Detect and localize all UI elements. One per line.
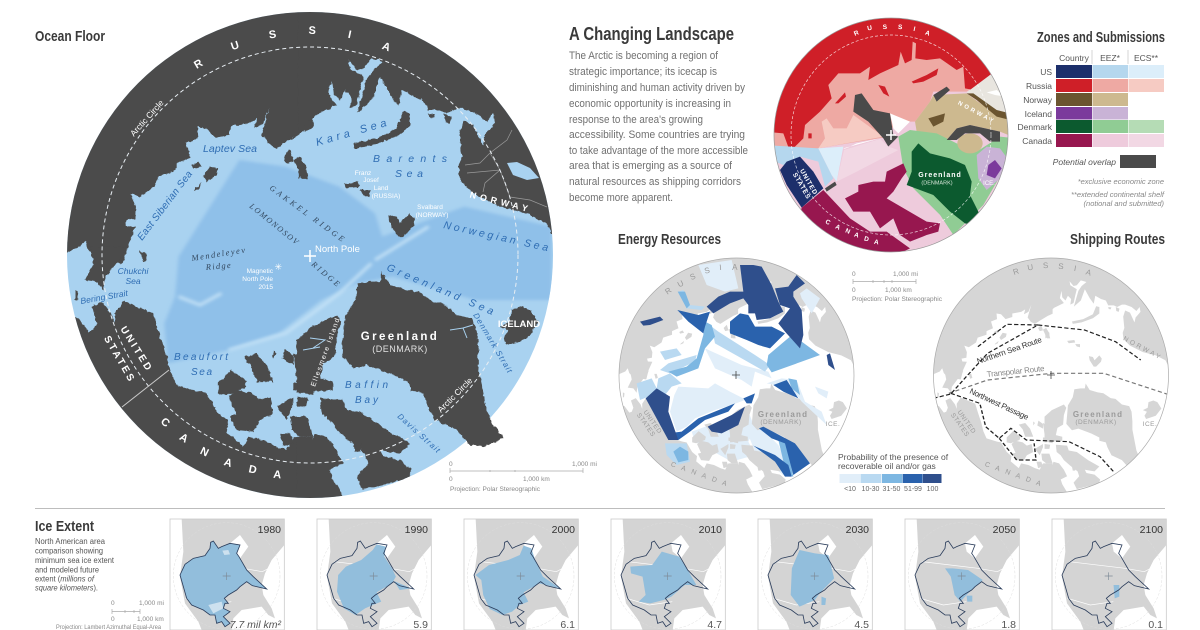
- intro text: economic opportunity is increasing in: [569, 98, 731, 110]
- scale bar: energy: 0: [852, 287, 856, 294]
- pole marker: [1047, 371, 1055, 379]
- Iceland land: [987, 160, 1002, 178]
- label: US zones: [791, 168, 819, 201]
- labels: Arctic Circle: [128, 98, 475, 414]
- label: Canada zones: A: [834, 223, 841, 232]
- label: United States: STATES: [101, 334, 137, 385]
- labels: Russia zones: I: [913, 26, 916, 33]
- label: Greenland: [361, 331, 439, 354]
- legend: zones table: Canada: [1022, 136, 1052, 146]
- labels: seas: Beaufort: [174, 352, 229, 363]
- labels: ridges: Mendeleyev: [190, 245, 246, 263]
- labels: seas: Denmark Strait: [471, 311, 514, 375]
- circle outline: [934, 258, 1168, 493]
- potential overlap: [853, 87, 1000, 147]
- text: ice extent description: and modeled future: [35, 566, 100, 574]
- Denmark EEZ: [897, 130, 1017, 235]
- overlap sliver: [825, 182, 837, 192]
- north pole marker: North Pole: [315, 244, 360, 255]
- Canada EEZ: [844, 136, 952, 234]
- text: ice extent description: minimum sea ice extent: [35, 556, 115, 565]
- resource probability below 10, under land: [692, 415, 785, 476]
- Russia EEZ: [774, 42, 970, 148]
- label: Greenland zones: (DENMARK): [921, 180, 953, 186]
- labels: energy map: I: [719, 263, 723, 272]
- map: 2030: [758, 519, 872, 630]
- labels: routes: Northwest Passage: [968, 387, 1030, 422]
- intro text: accessibility. Some countries are trying: [569, 129, 745, 141]
- label: magnetic north pole: Magnetic: [247, 268, 274, 275]
- Russia land: [774, 18, 991, 147]
- label: Canada zones: A: [853, 232, 860, 240]
- legend: oil and gas probability: <10: [844, 486, 856, 493]
- label: Russia: A: [380, 40, 392, 54]
- labels: islands: Franz: [355, 170, 371, 177]
- labels: energy map: S: [689, 271, 697, 282]
- label: Russia: S: [268, 29, 277, 41]
- footnotes: [1071, 177, 1165, 208]
- scale bar: ice extent: 1,000 mi: [139, 600, 164, 607]
- scale bar: ice extent: 1,000 km: [137, 616, 164, 623]
- labels: shipping map places: S: [1058, 262, 1064, 271]
- legend: zones table: ECS**: [1134, 53, 1159, 63]
- resource probability below 10: [670, 260, 828, 432]
- intro text: area that is emerging as a source of: [569, 160, 733, 172]
- legend: oil and gas probability: Probability of the presence of: [838, 452, 949, 462]
- label: magnetic north pole: North Pole: [242, 276, 273, 283]
- label: Canada zones: N: [844, 227, 851, 236]
- label: Greenland zones: Greenland: [918, 172, 962, 179]
- scale bar: energy: 1,000 km: [885, 287, 912, 294]
- labels: ridges: GAKKEL RIDGE: [268, 183, 346, 244]
- labels: energy map: S: [703, 266, 711, 276]
- heading: Ocean Floor: Ocean Floor: [35, 28, 105, 45]
- label: Greenland: Greenland: [361, 331, 439, 343]
- intro text: diminishing and human activity driven by: [569, 82, 745, 94]
- labels: islands: Josef: [363, 177, 379, 184]
- label: United States: UNITED: [118, 325, 155, 375]
- scale bar: energy: Projection: Polar Stereographic: [852, 296, 943, 303]
- white sea: [987, 90, 1001, 96]
- resource probability 31 to 50: [668, 292, 820, 477]
- label: Russia: I: [347, 29, 352, 41]
- label: Russia: R: [192, 57, 205, 72]
- labels: energy map: UNITED: [642, 409, 663, 435]
- map: 1980: 1980: [258, 524, 281, 536]
- labels: islands: [310, 170, 448, 388]
- legend: potential overlap: Potential overlap: [1053, 157, 1116, 167]
- legend: oil and gas probability: recoverable oil and/or gas: [838, 461, 936, 471]
- label: Canada zones: D: [863, 236, 870, 244]
- scale bar: energy: 0: [852, 271, 856, 278]
- label: Canada zones: [824, 218, 879, 246]
- label: Norway: NORWAY: [469, 190, 533, 215]
- labels: Russia zones: S: [898, 24, 903, 31]
- label: Canada: A: [273, 469, 282, 481]
- legend: oil and gas probability: 51-99: [904, 486, 922, 493]
- map: 2030: 2030: [846, 524, 869, 536]
- scale bar: ocean floor: Projection: Polar Stereographic: [450, 486, 541, 493]
- labels: energy map: ICE.: [826, 421, 840, 428]
- labels: shipping map places: I: [1073, 264, 1078, 273]
- labels: islands: Ellesmere Island: [310, 318, 342, 388]
- label: US zones: STATES: [791, 172, 812, 201]
- intro text: to take advantage of the more accessible: [569, 145, 748, 157]
- label: Canada: A: [222, 456, 234, 470]
- label: Russia: S: [308, 25, 316, 37]
- northwest passage: [951, 393, 1114, 472]
- legend: zones table: Norway: [1023, 95, 1053, 105]
- labels: islands: (RUSSIA): [372, 193, 400, 200]
- labels: shipping map places: (DENMARK): [1075, 419, 1117, 426]
- panel: shipping map: [930, 254, 1175, 496]
- map: 1980: [170, 519, 284, 630]
- intro text: [569, 50, 748, 204]
- legend: zones table: US: [1040, 67, 1052, 77]
- label: magnetic north pole: 2015: [259, 284, 273, 291]
- intro text: The Arctic is becoming a region of: [569, 50, 719, 62]
- labels: islands: (NORWAY): [416, 212, 448, 219]
- US EEZ: [774, 146, 834, 186]
- heading: Shipping Routes: Shipping Routes: [1070, 231, 1165, 248]
- labels: seas: Davis Strait: [396, 412, 442, 455]
- Canada land: [801, 163, 940, 252]
- map: 2010: 2010: [699, 524, 722, 536]
- labels: energy map: Greenland: [758, 410, 808, 419]
- labels: seas: Norwegian Sea: [442, 219, 550, 254]
- panel: energy map: [616, 254, 861, 496]
- label: Greenland: (DENMARK): [372, 344, 428, 354]
- label: Ice zones: ICE.: [983, 181, 995, 187]
- labels: energy map: CANADA: [670, 461, 733, 490]
- label: United States: [101, 325, 155, 385]
- label: Russia: U: [229, 39, 241, 53]
- intro text: natural resources as shipping corridors: [569, 176, 741, 188]
- labels: energy map: [635, 263, 840, 490]
- Greenland land: [907, 143, 983, 227]
- Iceland EEZ: [977, 147, 1007, 190]
- Arctic circle dashed line: [102, 47, 518, 463]
- scale bar: ice extent: 0: [111, 616, 115, 623]
- land: [930, 254, 1175, 496]
- scale bar: ocean floor: 0: [449, 461, 453, 468]
- Norway coast: [966, 93, 1006, 120]
- US ECS: [818, 147, 843, 182]
- pole marker: [732, 371, 740, 379]
- labels: energy map: STATES: [635, 412, 657, 438]
- map: 2000: [464, 519, 578, 630]
- label: Canada zones: C: [824, 218, 832, 227]
- legend: oil and gas probability: 31-50: [883, 486, 901, 493]
- label: Canada: N: [198, 445, 211, 459]
- heading: A Changing Landscape: A Changing Landscape: [569, 24, 734, 44]
- divider: [35, 508, 1165, 510]
- resource probability 51 to 99: [668, 310, 810, 477]
- labels: seas: Chukchi: [118, 266, 149, 276]
- legend: oil and gas probability: 100: [927, 486, 938, 493]
- labels: Russia zones: R: [853, 29, 860, 38]
- Norway mainland: [967, 75, 1006, 112]
- labels: islands: Svalbard: [417, 204, 443, 211]
- legend: potential overlap: [1053, 155, 1156, 168]
- map: 2000: 2000: [552, 524, 575, 536]
- label: Canada zones: A: [873, 239, 879, 246]
- US Canada border: [122, 370, 169, 407]
- map: 2010: [611, 519, 725, 630]
- labels: ridges: [190, 183, 346, 288]
- circle outline: [619, 258, 854, 493]
- pole marker: [886, 130, 896, 140]
- labels: ridges: LOMONOSOV: [247, 201, 301, 247]
- label: Canada: C: [158, 416, 172, 430]
- labels: seas: Laptev Sea: [203, 143, 257, 155]
- labels: Arctic Circle: Arctic Circle: [435, 375, 475, 414]
- label: magnetic north pole: [242, 262, 282, 291]
- circle outline: [774, 18, 1008, 252]
- intro text: response to the area's growing: [569, 114, 703, 126]
- labels: ridges: RIDGE: [309, 259, 342, 288]
- Greenland landmass: [342, 272, 503, 447]
- dashed arctic circle: [791, 35, 991, 235]
- intro text: strategic importance; its icecap is: [569, 66, 717, 78]
- legend: zones table: Country: [1059, 53, 1090, 63]
- scale bar: energy: [852, 271, 943, 303]
- label: Canada: D: [247, 463, 258, 477]
- resource probability 10 to 30: [637, 290, 770, 465]
- label: Norway zones: NORWAY: [957, 101, 996, 126]
- labels: energy map: A: [732, 263, 738, 272]
- Canada ECS: [837, 139, 898, 182]
- labels: shipping map places: UNITED: [956, 409, 977, 435]
- labels: seas: Bay: [355, 395, 379, 406]
- legend: oil and gas probability: 10-30: [862, 486, 880, 493]
- labels: routes: [968, 335, 1045, 422]
- labels: seas: Kara Sea: [315, 117, 388, 149]
- scale bar: ice extent: [56, 600, 164, 630]
- Russia ECS: [818, 115, 883, 148]
- text: ice extent description: extent (millions of: [35, 574, 95, 584]
- label: Iceland: ICELAND: [498, 319, 540, 330]
- labels: routes: Transpolar Route: [986, 364, 1045, 379]
- footnotes: *exclusive economic zone: [1078, 177, 1164, 186]
- US land: [780, 157, 823, 208]
- legend: zones table: Iceland: [1025, 109, 1052, 119]
- Norway EEZ: [915, 93, 1017, 140]
- land: [616, 254, 861, 496]
- labels: seas: Barents: [373, 153, 448, 165]
- scale bar: energy: 1,000 mi: [893, 271, 918, 278]
- map: 1990: [317, 519, 431, 630]
- label: Russia: [192, 25, 392, 72]
- scale bar: ocean floor: 1,000 mi: [572, 461, 597, 468]
- resource probability 100: [707, 265, 783, 320]
- labels: energy map: (DENMARK): [760, 419, 802, 426]
- labels: seas: [80, 117, 550, 455]
- scale bar: ocean floor: 1,000 km: [523, 476, 550, 483]
- labels: ridges: Ridge: [204, 260, 231, 272]
- national borders: [465, 130, 547, 207]
- map: 2050: [905, 519, 1019, 630]
- labels: Arctic Circle: Arctic Circle: [128, 98, 166, 138]
- legend: zones table: Denmark: [1018, 122, 1053, 132]
- labels: shipping map places: ICE.: [1143, 421, 1157, 428]
- labels: Russia zones: U: [867, 25, 873, 32]
- scale bar: ice extent: 0: [111, 600, 115, 607]
- labels: seas: Baffin: [345, 380, 388, 391]
- labels: seas: Sea: [395, 168, 423, 180]
- labels: shipping map places: NORWAY: [1122, 335, 1164, 362]
- labels: shipping map places: CANADA: [984, 461, 1047, 490]
- ocean basin shading: [164, 160, 552, 363]
- legend: zones table: Russia: [1026, 81, 1052, 91]
- labels: Russia zones: [853, 24, 931, 38]
- scale bar: ocean floor: 0: [449, 476, 453, 483]
- label: Canada: A: [177, 431, 190, 446]
- labels: seas: East Siberian Sea: [136, 169, 195, 243]
- labels: shipping map places: STATES: [949, 412, 971, 438]
- labels: shipping map places: U: [1027, 263, 1034, 273]
- label: Greenland zones: [918, 172, 962, 186]
- legend: zones table: [1018, 50, 1164, 147]
- labels: Russia zones: A: [924, 29, 931, 38]
- labels: seas: Greenland Sea: [385, 262, 496, 318]
- labels: Russia zones: S: [882, 24, 888, 31]
- labels: shipping map places: R: [1012, 266, 1021, 277]
- labels: shipping map places: Greenland: [1073, 410, 1123, 419]
- map: 2050: 2050: [993, 524, 1016, 536]
- heading: Ice Extent: Ice Extent: [35, 518, 94, 535]
- labels: shipping map places: A: [1085, 267, 1093, 278]
- footnotes: **extended continental shelf: [1071, 190, 1165, 199]
- labels: shipping map places: S: [1043, 261, 1049, 270]
- fjords: [303, 325, 473, 350]
- northern sea route: [933, 324, 1141, 398]
- footnotes: (notional and submitted): [1084, 199, 1164, 208]
- transpolar route: [949, 373, 1170, 395]
- labels: energy map: U: [676, 278, 686, 289]
- text: ice extent description: square kilometers).: [35, 584, 98, 592]
- panel: ocean floor map: [60, 3, 567, 503]
- labels: energy map: R: [663, 285, 674, 296]
- scale bar: ocean floor: [449, 461, 597, 493]
- text: ice extent description: [35, 537, 115, 592]
- label: Canada: [158, 416, 282, 481]
- label: magnetic north pole: ✳: [274, 262, 282, 272]
- labels: islands: Land: [374, 185, 389, 192]
- labels: seas: Sea: [125, 276, 141, 286]
- intro text: become more apparent.: [569, 192, 673, 204]
- map: 1990: 1990: [405, 524, 428, 536]
- legend: oil and gas probability: [838, 452, 949, 493]
- map: 2100: [1052, 519, 1166, 630]
- Jan Mayen zone: [957, 133, 983, 153]
- heading: Energy Resources: Energy Resources: [618, 231, 721, 248]
- land masses: [60, 3, 567, 503]
- panel: zones map: [763, 8, 1017, 268]
- Svalbard: [928, 113, 945, 127]
- labels: seas: Bering Strait: [80, 288, 129, 306]
- text: ice extent description: comparison showing: [35, 546, 103, 556]
- labels: routes: Northern Sea Route: [976, 335, 1043, 366]
- text: ice extent description: North American area: [35, 537, 106, 546]
- labels: seas: Sea: [191, 367, 212, 378]
- label: US zones: UNITED: [798, 168, 819, 197]
- north pole marker: [304, 244, 360, 262]
- unclaimed gap: [843, 113, 910, 149]
- legend: zones table: EEZ*: [1100, 53, 1121, 63]
- lake: [507, 162, 539, 180]
- labels: shipping map places: [949, 261, 1164, 490]
- map: 2100: 2100: [1140, 524, 1163, 536]
